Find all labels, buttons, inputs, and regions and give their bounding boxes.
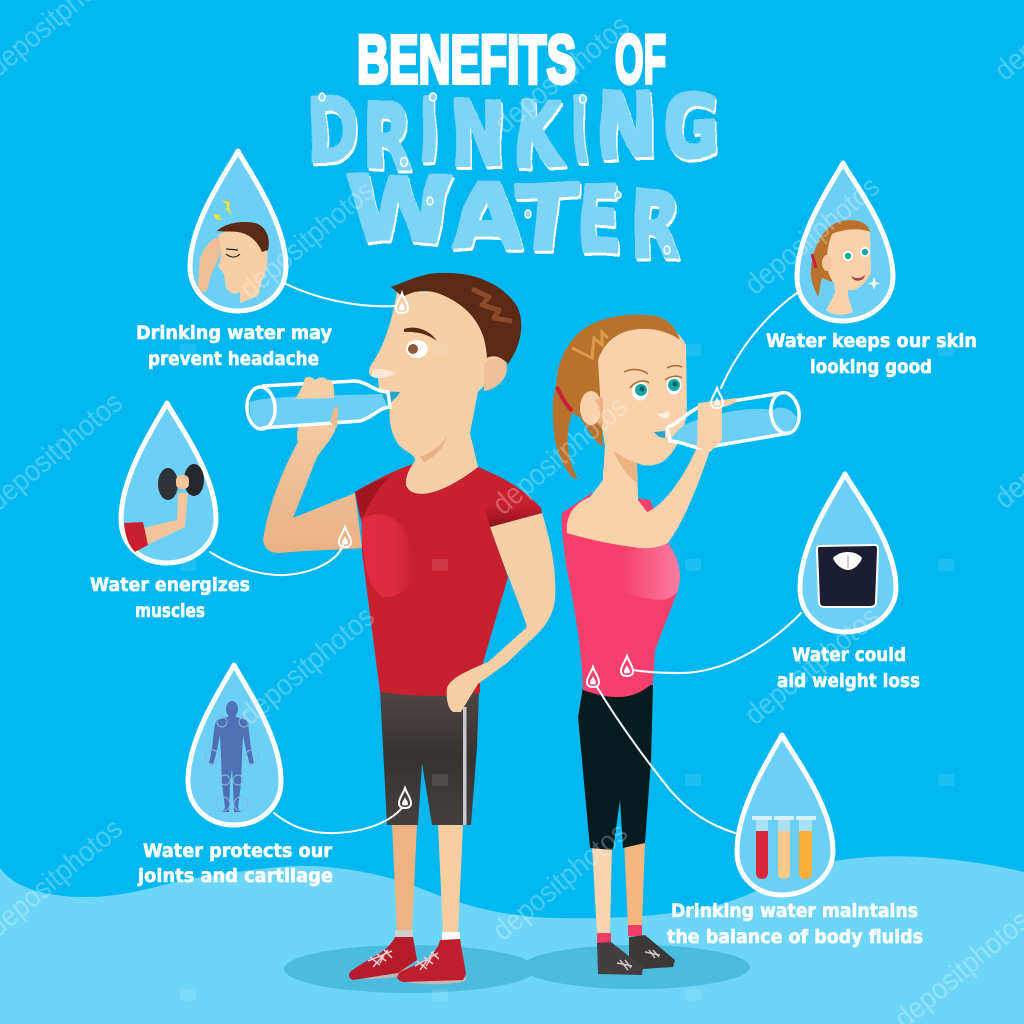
title: drinking water: N bbox=[449, 82, 506, 185]
text: fluids caption: the balance of body fluids bbox=[667, 926, 923, 948]
title: drinking water: K bbox=[514, 83, 564, 186]
title: benefits of: BENEFITS bbox=[357, 21, 576, 98]
icon: test tubes bbox=[752, 816, 816, 879]
text: muscles caption bbox=[90, 574, 250, 622]
ground shadows bbox=[284, 945, 750, 993]
title: drinking water, white shadow layer: N bbox=[600, 78, 658, 181]
man hair bbox=[391, 273, 521, 364]
text: joints caption: Water protects our bbox=[143, 840, 333, 862]
title: benefits of: OF bbox=[615, 21, 666, 98]
text: headache caption bbox=[136, 322, 333, 370]
marker drop: forehead bbox=[396, 293, 408, 313]
woman arm and shoulders bbox=[567, 447, 710, 548]
connector: weight bbox=[621, 613, 801, 676]
icon: body with joints bbox=[205, 701, 259, 812]
panel: weight drop bbox=[800, 474, 896, 632]
title: drinking water: R bbox=[362, 86, 414, 189]
title: drinking water: E bbox=[578, 169, 619, 272]
icon: sparkle bbox=[868, 277, 880, 290]
man front arm bbox=[263, 403, 362, 553]
icon: scale bbox=[817, 545, 878, 607]
title: drinking water, white shadow layer: D bbox=[308, 81, 358, 184]
man ear bbox=[484, 358, 507, 391]
text: skin caption: Water keeps our skin bbox=[766, 330, 977, 352]
text: fluids caption: Drinking water maintains bbox=[671, 900, 918, 922]
text: headache caption: prevent headache bbox=[148, 348, 319, 370]
icon: lightning bolts bbox=[213, 200, 232, 220]
man legs bbox=[392, 824, 463, 934]
title: drinking water: G bbox=[663, 75, 719, 178]
icon: woman face bbox=[811, 220, 880, 315]
man figure bbox=[263, 273, 555, 984]
connector: headache bbox=[286, 284, 408, 313]
man bottle bbox=[246, 377, 390, 430]
text: headache caption: Drinking water may bbox=[136, 322, 333, 344]
title: drinking water: D bbox=[307, 78, 357, 181]
text: weight caption bbox=[777, 644, 920, 692]
marker drop: arm bbox=[339, 527, 351, 547]
icon: dumbbell arm bbox=[124, 464, 204, 552]
watermark camera marks bbox=[180, 344, 954, 1001]
man shorts bbox=[380, 690, 479, 825]
woman legs bbox=[592, 840, 645, 934]
marker drop: hand bbox=[711, 388, 723, 408]
man hand on hip bbox=[447, 660, 507, 712]
title: drinking water: W bbox=[346, 159, 454, 262]
title: drinking water, white shadow layer: R bbox=[630, 176, 680, 279]
water wave ground bbox=[0, 856, 1024, 1024]
watermarks: depositphotos bbox=[233, 174, 381, 305]
woman hand bbox=[697, 398, 737, 452]
title: drinking water: R bbox=[629, 173, 679, 276]
hair tie bbox=[557, 387, 572, 411]
watermarks: depositphotos bbox=[486, 816, 634, 947]
man eye bbox=[404, 328, 437, 358]
woman eyes bbox=[624, 366, 682, 400]
title: drinking water bbox=[307, 75, 719, 276]
marker drop: shorts bbox=[399, 788, 411, 808]
text: muscles caption: Water energizes bbox=[90, 574, 250, 596]
title: drinking water, white shadow layer bbox=[308, 78, 720, 279]
title: drinking water, white shadow layer: I bbox=[574, 82, 592, 185]
marker drop: hip bbox=[587, 667, 599, 687]
text: muscles caption: muscles bbox=[135, 600, 205, 622]
panel: muscles drop bbox=[121, 403, 216, 563]
title: drinking water, white shadow layer: N bbox=[450, 85, 508, 188]
title: drinking water: T bbox=[514, 166, 576, 269]
woman socks bbox=[597, 925, 642, 943]
title: drinking water: A bbox=[454, 164, 521, 267]
woman hair bbox=[553, 315, 683, 479]
text: weight caption: Water could bbox=[792, 644, 906, 666]
text: skin caption: looking good bbox=[810, 356, 932, 378]
title: drinking water, white shadow layer: E bbox=[580, 172, 620, 275]
watermarks: depositphotos bbox=[486, 390, 634, 521]
watermarks: depositphotos bbox=[233, 600, 381, 731]
man socks bbox=[395, 930, 460, 941]
woman top bbox=[562, 493, 680, 697]
woman leggings bbox=[578, 685, 653, 850]
woman bottle bbox=[667, 391, 802, 452]
title: drinking water, white shadow layer: A bbox=[456, 167, 522, 270]
man shirt bbox=[355, 464, 542, 696]
woman ear bbox=[580, 391, 603, 425]
text: fluids caption bbox=[667, 900, 923, 948]
title: drinking water: I bbox=[421, 78, 438, 181]
watermarks: depositphotos bbox=[738, 600, 886, 731]
panel: skin drop bbox=[797, 163, 893, 321]
text: joints caption bbox=[137, 840, 333, 887]
connector: joints bbox=[274, 788, 411, 833]
man fingers bbox=[295, 377, 334, 399]
title: drinking water, white shadow layer: K bbox=[516, 86, 565, 189]
icon: man with headache bbox=[198, 200, 269, 303]
title: drinking water: I bbox=[573, 79, 590, 182]
text: weight caption: aid weight loss bbox=[777, 670, 920, 692]
woman head bbox=[598, 324, 687, 500]
panel: fluids drop bbox=[737, 735, 833, 895]
man shoes bbox=[349, 937, 466, 984]
title water splashes bbox=[319, 93, 670, 254]
title: drinking water, white shadow layer: R bbox=[364, 89, 416, 192]
text: skin caption bbox=[766, 330, 977, 378]
panel: joints drop bbox=[188, 665, 281, 825]
woman shoes bbox=[597, 935, 675, 975]
man back arm bbox=[470, 513, 555, 683]
panel: headache drop bbox=[190, 151, 286, 311]
man head bbox=[369, 290, 510, 494]
title: drinking water, white shadow layer: W bbox=[348, 162, 456, 265]
connector: muscles bbox=[210, 527, 351, 575]
connector: skin bbox=[711, 293, 797, 408]
connector: fluids bbox=[587, 667, 735, 833]
marker drop: waist bbox=[621, 656, 633, 676]
title: drinking water, white shadow layer: I bbox=[422, 81, 440, 184]
title: drinking water, white shadow layer: T bbox=[516, 169, 578, 272]
woman figure bbox=[553, 315, 710, 975]
text: joints caption: joints and cartilage bbox=[137, 865, 333, 887]
watermarks: depositphotos bbox=[738, 170, 886, 301]
title: drinking water, white shadow layer: G bbox=[664, 78, 720, 181]
title: drinking water: N bbox=[598, 75, 657, 178]
